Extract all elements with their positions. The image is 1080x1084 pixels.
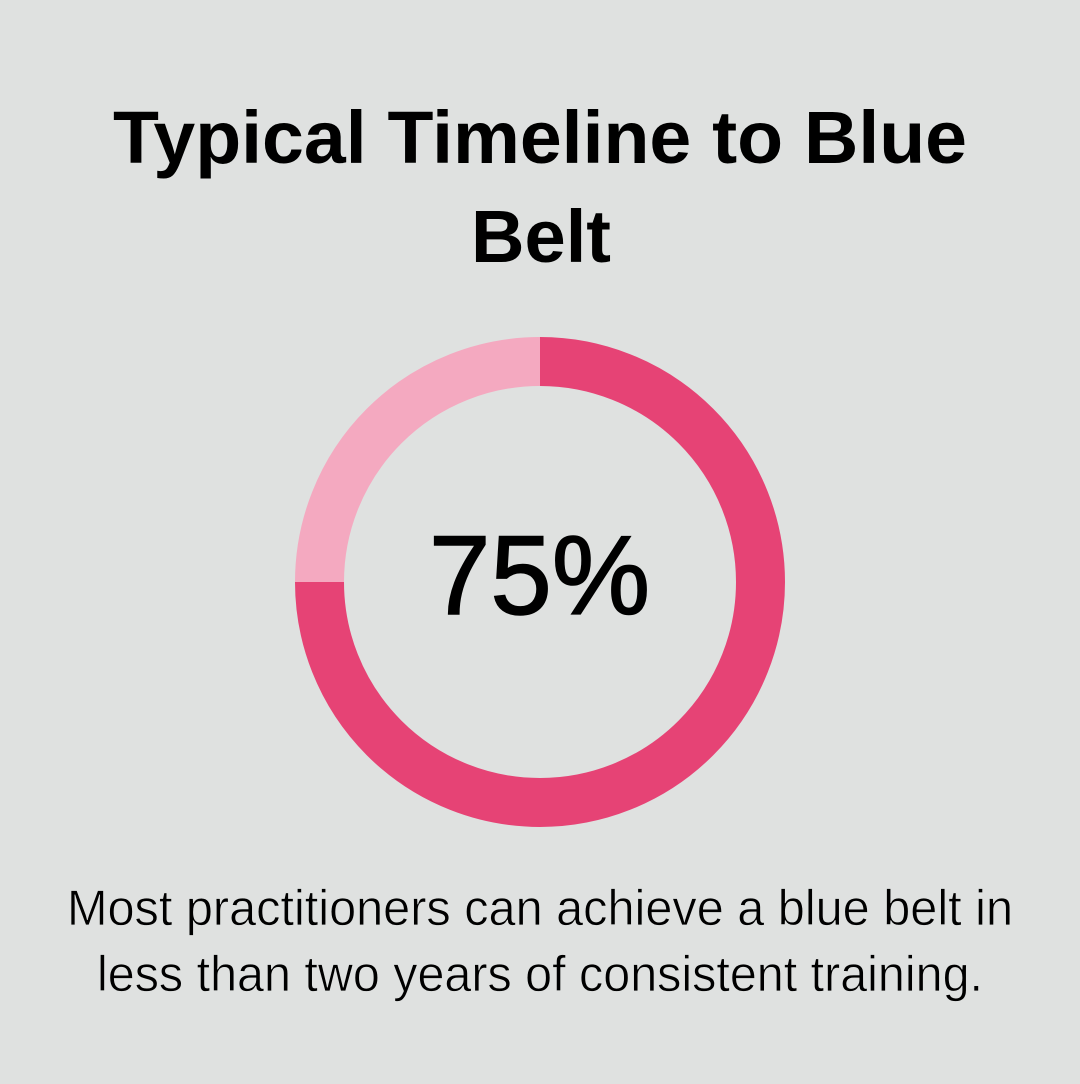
donut value segment bbox=[320, 362, 760, 802]
donut chart: 75% bbox=[320, 362, 760, 802]
caption: Most practitioners can achieve a blue belt in bbox=[67, 880, 1013, 936]
title: Typical Timeline to Blue bbox=[113, 96, 967, 179]
caption bbox=[67, 880, 1013, 1002]
caption: less than two years of consistent training. bbox=[97, 946, 983, 1002]
title bbox=[113, 96, 967, 278]
title: Belt bbox=[471, 195, 611, 278]
percentage value: 75% bbox=[429, 513, 650, 638]
donut remainder segment bbox=[320, 362, 540, 582]
